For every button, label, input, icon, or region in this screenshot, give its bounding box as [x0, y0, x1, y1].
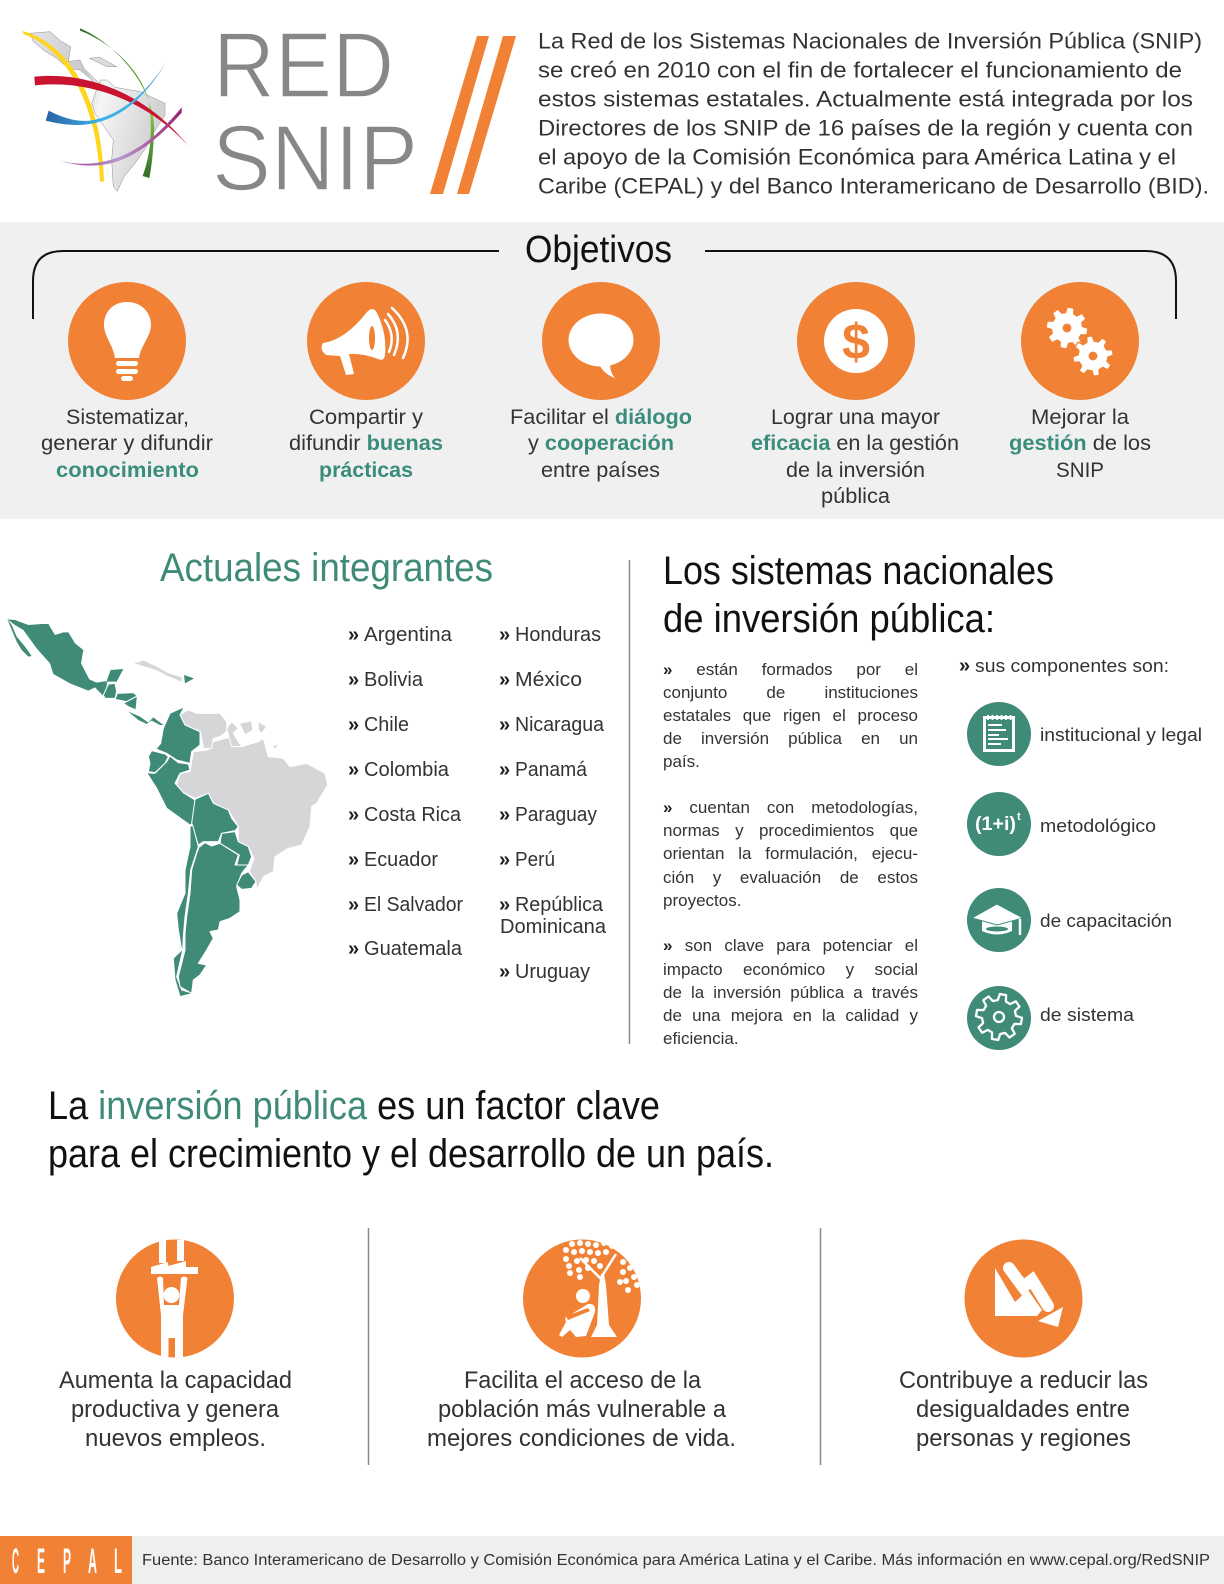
- text: objetivo eficacia: eficacia en la gestión: [751, 432, 959, 455]
- text: objetivo conocimiento: conocimiento: [56, 459, 199, 482]
- text: contribuye a reducir: personas y regiones: [916, 1425, 1131, 1452]
- logo: CEPAL wordmark: E: [37, 1542, 45, 1581]
- text: objetivo conocimiento: Sistematizar,: [66, 406, 189, 429]
- text block: sistemas nacionales párrafo 1: [663, 660, 918, 771]
- list: countries column 2: »: [499, 849, 510, 871]
- logo: CEPAL wordmark: P: [63, 1542, 71, 1581]
- heading: Actuales integrantes: Actuales integrantes: [160, 546, 493, 590]
- text: metodológico: metodológico: [1040, 815, 1156, 836]
- footer bar: [0, 1536, 1224, 1584]
- list: countries column 2: Perú: [515, 849, 555, 871]
- logo: CEPAL wordmark: C: [12, 1542, 19, 1581]
- list: countries column 2: Uruguay: [515, 961, 590, 983]
- icon: speech bubble: [542, 282, 660, 400]
- text: objetivo eficacia: [751, 406, 959, 508]
- list: countries column 1: Colombia: [364, 759, 450, 781]
- list: countries column 1: El Salvador: [364, 894, 463, 916]
- list: countries column 2: »: [499, 804, 510, 826]
- list: countries column 2: República: [515, 894, 604, 916]
- logo: Red SNIP map with coloured arcs: [23, 28, 188, 191]
- icon: dollar coin: [797, 282, 915, 400]
- map: Latin America members: [7, 619, 328, 997]
- text: de inversión pública en un: [663, 729, 918, 748]
- text: de sistema: de sistema: [1040, 1004, 1135, 1025]
- panel: objetivos: [0, 222, 1224, 519]
- text: objetivo eficacia: Lograr una mayor: [771, 406, 940, 429]
- list: countries column 1: »: [348, 759, 359, 781]
- heading: Objetivos: Objetivos: [525, 229, 672, 271]
- text: facilita el acceso: mejores condiciones de vida.: [427, 1425, 736, 1452]
- heading: La inversión pública: [48, 1084, 774, 1176]
- text: sus componentes son: sus componentes son:: [975, 655, 1169, 676]
- intro text block: [538, 28, 1209, 198]
- text: institucional y legal: institucional y legal: [1040, 724, 1202, 745]
- list: countries column 2: Honduras: [515, 624, 601, 646]
- list: countries column 1: »: [348, 804, 359, 826]
- intro text block: estos sistemas estatales. Actualmente está integrada por los: [538, 86, 1193, 112]
- list: countries column 1: Argentina: [364, 624, 453, 646]
- text: ción y evaluación de estos: [663, 868, 918, 887]
- text: » son clave para potenciar el: [663, 936, 918, 955]
- text: fuente: Fuente: Banco Interamericano de Desarrollo y Comisión Económica para América Latina y el Caribe. Más información en www.cepal.org/RedSNIP: [142, 1552, 1210, 1569]
- icon: orange double slash: [430, 36, 516, 194]
- text: conjunto de instituciones: [663, 683, 918, 702]
- list: countries column 1: Chile: [364, 714, 409, 736]
- list: countries column 2: »: [499, 714, 510, 736]
- list: countries column 2: »: [499, 894, 510, 916]
- list: countries column 1: »: [348, 669, 359, 691]
- list: countries column 1: Ecuador: [364, 849, 438, 871]
- list: countries column 1: Costa Rica: [364, 804, 462, 826]
- text: objetivo eficacia: de la inversión: [786, 459, 925, 482]
- logo: CEPAL wordmark: A: [88, 1542, 97, 1581]
- icon: dollar coin: $: [842, 314, 870, 370]
- text: objetivo conocimiento: generar y difundir: [41, 432, 213, 455]
- list: countries column 1: »: [348, 938, 359, 960]
- list: countries column 2: México: [515, 669, 582, 691]
- intro text block: se creó en 2010 con el fin de fortalecer el funcionamiento de: [538, 58, 1182, 82]
- text: facilita el acceso: población más vulnerable a: [438, 1396, 727, 1423]
- list: countries column 1: »: [348, 849, 359, 871]
- text: objetivo gestión: gestión de los: [1009, 432, 1151, 455]
- text: aumenta la capacidad: nuevos empleos.: [85, 1425, 266, 1452]
- heading: Los sistemas nacionales: Los sistemas nacionales: [663, 549, 1054, 593]
- text: facilita el acceso: [427, 1367, 736, 1452]
- text: país.: [663, 752, 700, 771]
- icon: descending arrow: [964, 1240, 1082, 1358]
- intro text block: Caribe (CEPAL) y del Banco Interamericano de Desarrollo (BID).: [538, 174, 1209, 198]
- intro text block: Directores de los SNIP de 16 países de la región y cuenta con: [538, 116, 1193, 140]
- list: countries column 2: »: [499, 759, 510, 781]
- text: » están formados por el: [663, 660, 918, 679]
- list: countries column 2: »: [499, 669, 510, 691]
- icon: light bulb: [68, 282, 186, 400]
- text: objetivo buenas prácticas: prácticas: [319, 459, 413, 482]
- text: objetivo diálogo y cooperación: Facilitar el diálogo: [510, 406, 692, 429]
- text: objetivo eficacia: pública: [821, 485, 890, 508]
- heading: La inversión pública: La inversión pública es un factor clave: [48, 1084, 660, 1128]
- text: objetivo gestión: [1009, 406, 1151, 482]
- icon: graduation cap: [967, 888, 1031, 952]
- text: facilita el acceso: Facilita el acceso de la: [464, 1367, 702, 1394]
- text: aumenta la capacidad: Aumenta la capacidad: [59, 1367, 292, 1394]
- list: countries column 1: [348, 624, 463, 960]
- list: countries column 2: [499, 624, 607, 983]
- icon: notebook: [967, 702, 1031, 766]
- intro text block: La Red de los Sistemas Nacionales de Inversión Pública (SNIP): [538, 28, 1202, 54]
- list: countries column 2: Paraguay: [515, 804, 597, 826]
- text: de la inversión pública a través: [663, 983, 918, 1002]
- list: countries column 1: »: [348, 624, 359, 646]
- list: countries column 1: »: [348, 894, 359, 916]
- icon: person under tree: [523, 1240, 641, 1358]
- icon: megaphone: [307, 282, 425, 400]
- text: aumenta la capacidad: [59, 1367, 292, 1452]
- text block: sistemas nacionales párrafo 3: [663, 936, 918, 1048]
- text block: sistemas nacionales párrafo 2: [663, 798, 918, 910]
- text: de una mejora en la calidad y: [663, 1006, 918, 1025]
- title: RED SNIP: RED: [213, 13, 394, 117]
- list: countries column 1: Guatemala: [364, 938, 463, 960]
- text: orientan la formulación, ejecu-: [663, 844, 918, 863]
- text: proyectos.: [663, 891, 741, 910]
- text: eficiencia.: [663, 1029, 739, 1048]
- text: contribuye a reducir: desigualdades entre: [916, 1396, 1130, 1423]
- list: countries column 2: »: [499, 624, 510, 646]
- intro text block: el apoyo de la Comisión Económica para América Latina y el: [538, 144, 1176, 170]
- text: objetivo gestión: Mejorar la: [1031, 406, 1129, 429]
- text: objetivo gestión: SNIP: [1056, 459, 1104, 482]
- text: aumenta la capacidad: productiva y genera: [71, 1396, 280, 1423]
- icon: formula: (1+i): [975, 814, 1016, 835]
- text: » cuentan con metodologías,: [663, 798, 918, 817]
- list: countries column 2: Dominicana: [500, 916, 607, 938]
- text: contribuye a reducir: [899, 1367, 1148, 1452]
- heading: La inversión pública: para el crecimiento y el desarrollo de un país.: [48, 1132, 774, 1176]
- heading: Los sistemas nacionales: de inversión pública:: [663, 597, 995, 641]
- text: sus componentes son: »: [959, 655, 970, 677]
- heading: Los sistemas nacionales: [663, 549, 1054, 641]
- list: countries column 1: »: [348, 714, 359, 736]
- icon: gear outline: [967, 986, 1031, 1050]
- text: objetivo diálogo y cooperación: entre países: [541, 459, 660, 482]
- icon: formula: t: [1017, 811, 1021, 823]
- text: objetivo diálogo y cooperación: [510, 406, 692, 482]
- text: objetivo conocimiento: [41, 406, 213, 482]
- list: countries column 1: Bolivia: [364, 669, 424, 691]
- icon: worker lifting factory: [116, 1240, 234, 1360]
- text: contribuye a reducir: Contribuye a reducir las: [899, 1367, 1148, 1394]
- list: countries column 2: Panamá: [515, 759, 588, 781]
- title: RED SNIP: SNIP: [212, 106, 418, 210]
- text: impacto económico y social: [663, 960, 918, 979]
- icon: formula: [967, 792, 1031, 856]
- footer bar: L: [114, 1542, 122, 1581]
- text: de capacitación: de capacitación: [1040, 910, 1172, 931]
- text: estatales que rigen el proceso: [663, 706, 918, 725]
- text: objetivo buenas prácticas: Compartir y: [309, 406, 424, 429]
- icon: gears: [1021, 282, 1139, 400]
- text: objetivo diálogo y cooperación: y cooperación: [528, 432, 674, 455]
- title: RED SNIP: [212, 13, 418, 210]
- text: objetivo buenas prácticas: difundir buenas: [289, 432, 443, 455]
- text: objetivo buenas prácticas: [289, 406, 443, 482]
- logo: CEPAL wordmark: [12, 1542, 122, 1581]
- list: countries column 2: Nicaragua: [515, 714, 605, 736]
- text: normas y procedimientos que: [663, 821, 918, 840]
- list: countries column 2: »: [499, 961, 510, 983]
